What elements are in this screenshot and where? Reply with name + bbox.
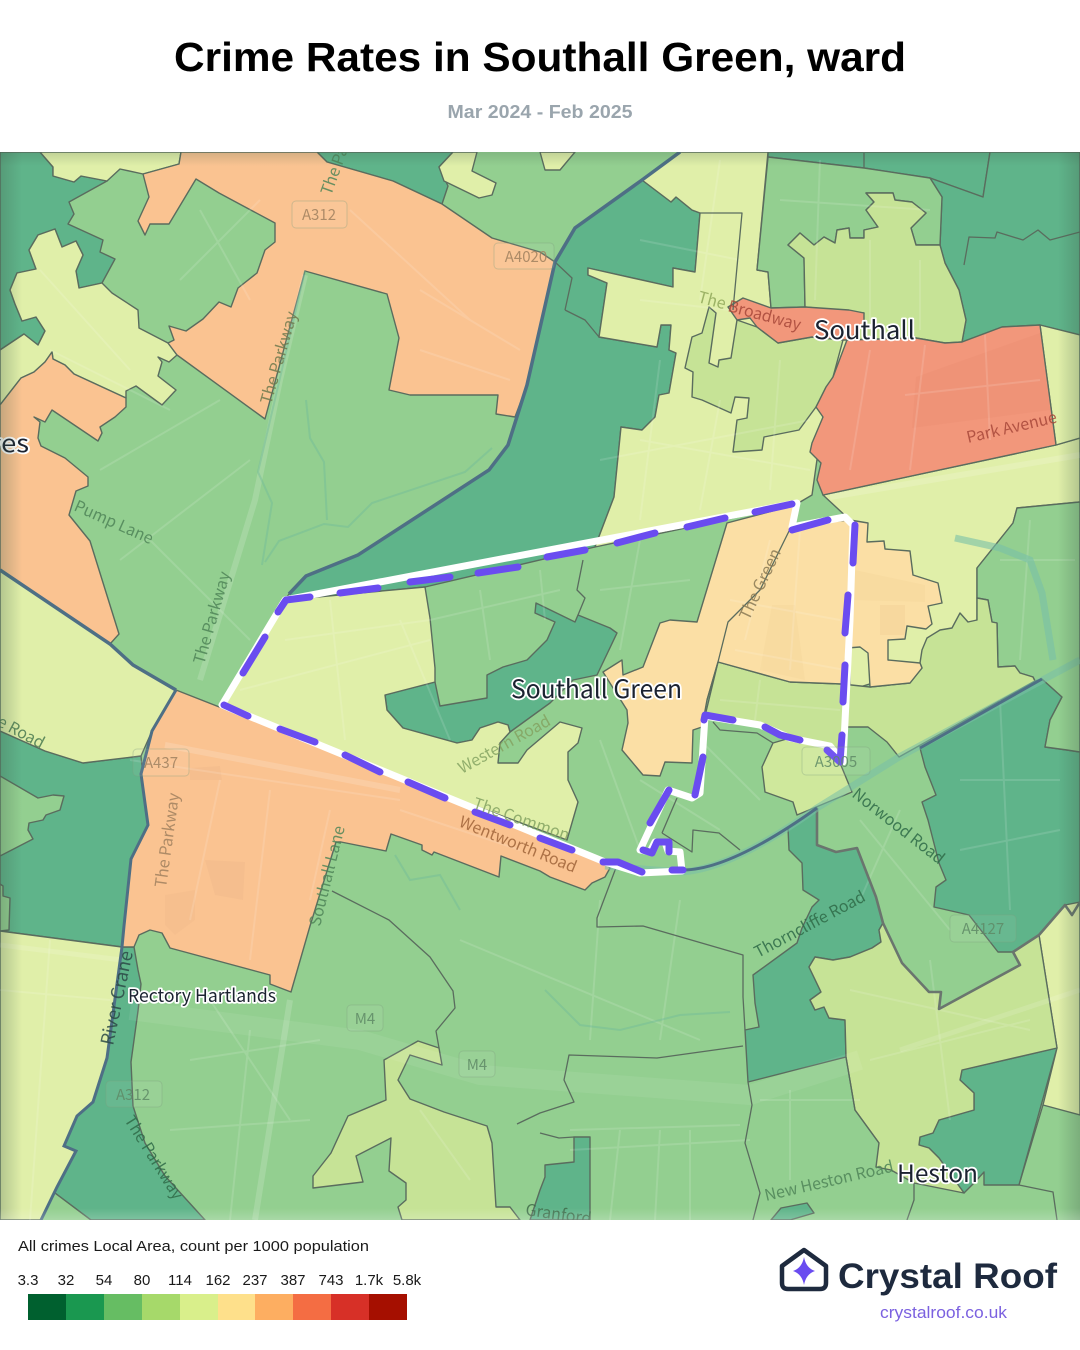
light green areas [313, 193, 1057, 1220]
dark green areas [0, 152, 1080, 1220]
road labels: Thorncliffe Road [749, 883, 869, 962]
road labels: The Pa [313, 142, 353, 198]
legend scale values: 1.7k [355, 1272, 384, 1289]
legend scale values: 32 [58, 1272, 74, 1289]
orange areas [0, 152, 610, 992]
road labels: The Green [732, 544, 786, 623]
base green holes in west dark area [0, 776, 64, 931]
title: Crime Rates in Southall Green, ward [174, 34, 906, 80]
road labels: A312 [116, 1084, 150, 1105]
road labels: Western Road [453, 708, 554, 778]
road labels: M4 [467, 1054, 487, 1075]
subtitle: date range: Mar 2024 - Feb 2025 [448, 101, 632, 122]
place labels: Heston [897, 1154, 978, 1189]
road labels: Park Avenue [964, 404, 1059, 448]
road labels: The Parkway [186, 568, 235, 666]
salmon areas [728, 298, 1056, 495]
place labels: Rectory Hartlands [128, 982, 276, 1008]
thick grey bordered dark area [745, 808, 883, 1082]
road labels: A312 [302, 204, 336, 225]
website url: crystalroof.co.uk [880, 1304, 1008, 1322]
road labels: Southall Lane [302, 823, 350, 928]
legend scale values [18, 1272, 422, 1289]
road texture [0, 160, 1080, 1220]
land-use patches [165, 333, 1050, 935]
legend [18, 1238, 422, 1320]
road labels: The Parkway [120, 1110, 191, 1204]
road labels: M4 [355, 1008, 375, 1029]
legend title: All crimes Local Area, count per 1000 population [18, 1238, 369, 1255]
legend scale values: 743 [318, 1272, 344, 1289]
place labels: Southall [814, 311, 915, 347]
road labels: Granford [524, 1196, 593, 1229]
logo wordmark: Crystal Roof [838, 1257, 1057, 1296]
railway and canal lines [0, 152, 1080, 1220]
road labels: The Parkway [253, 308, 302, 406]
place labels: Southall Green [511, 670, 682, 706]
road labels: A437 [144, 752, 178, 773]
road labels [0, 142, 1059, 1229]
road labels: Wentworth Road [456, 808, 581, 877]
legend scale values: 114 [168, 1272, 192, 1289]
road labels: The [696, 284, 729, 314]
ward boundary: Southall Green [222, 503, 855, 873]
legend scale values: 237 [242, 1272, 268, 1289]
logo: Crystal Roof [782, 1250, 1057, 1322]
legend scale values: 80 [134, 1272, 150, 1289]
road labels: A4020 [505, 246, 547, 267]
road labels: The Common [470, 790, 573, 846]
base green north east block [757, 157, 942, 308]
thick grey boundary [817, 808, 1080, 1009]
legend scale values: 54 [96, 1272, 112, 1289]
road labels: Norwood Road [848, 781, 951, 869]
pale peach area [603, 505, 942, 776]
road labels: New Heston Road [762, 1153, 896, 1206]
base green east block [977, 502, 1080, 752]
legend scale values: 387 [280, 1272, 306, 1289]
road labels: A3005 [815, 751, 857, 772]
map edge vignette [0, 152, 1080, 1220]
pale lime areas [0, 152, 1080, 1220]
place labels [0, 311, 978, 1189]
streams [258, 271, 730, 1030]
road labels: A4127 [962, 918, 1004, 939]
road labels: Pump Lane [71, 493, 158, 549]
road labels: Broadway [726, 293, 805, 335]
icon: house with star [782, 1250, 826, 1289]
legend scale values: 3.3 [18, 1272, 38, 1289]
road labels: The Parkway [147, 790, 184, 889]
legend colour bar [28, 1294, 407, 1320]
legend scale values: 5.8k [393, 1272, 422, 1289]
remaining boundaries [55, 153, 1080, 1220]
road labels: River Crane [93, 948, 139, 1047]
legend scale values: 162 [205, 1272, 231, 1289]
